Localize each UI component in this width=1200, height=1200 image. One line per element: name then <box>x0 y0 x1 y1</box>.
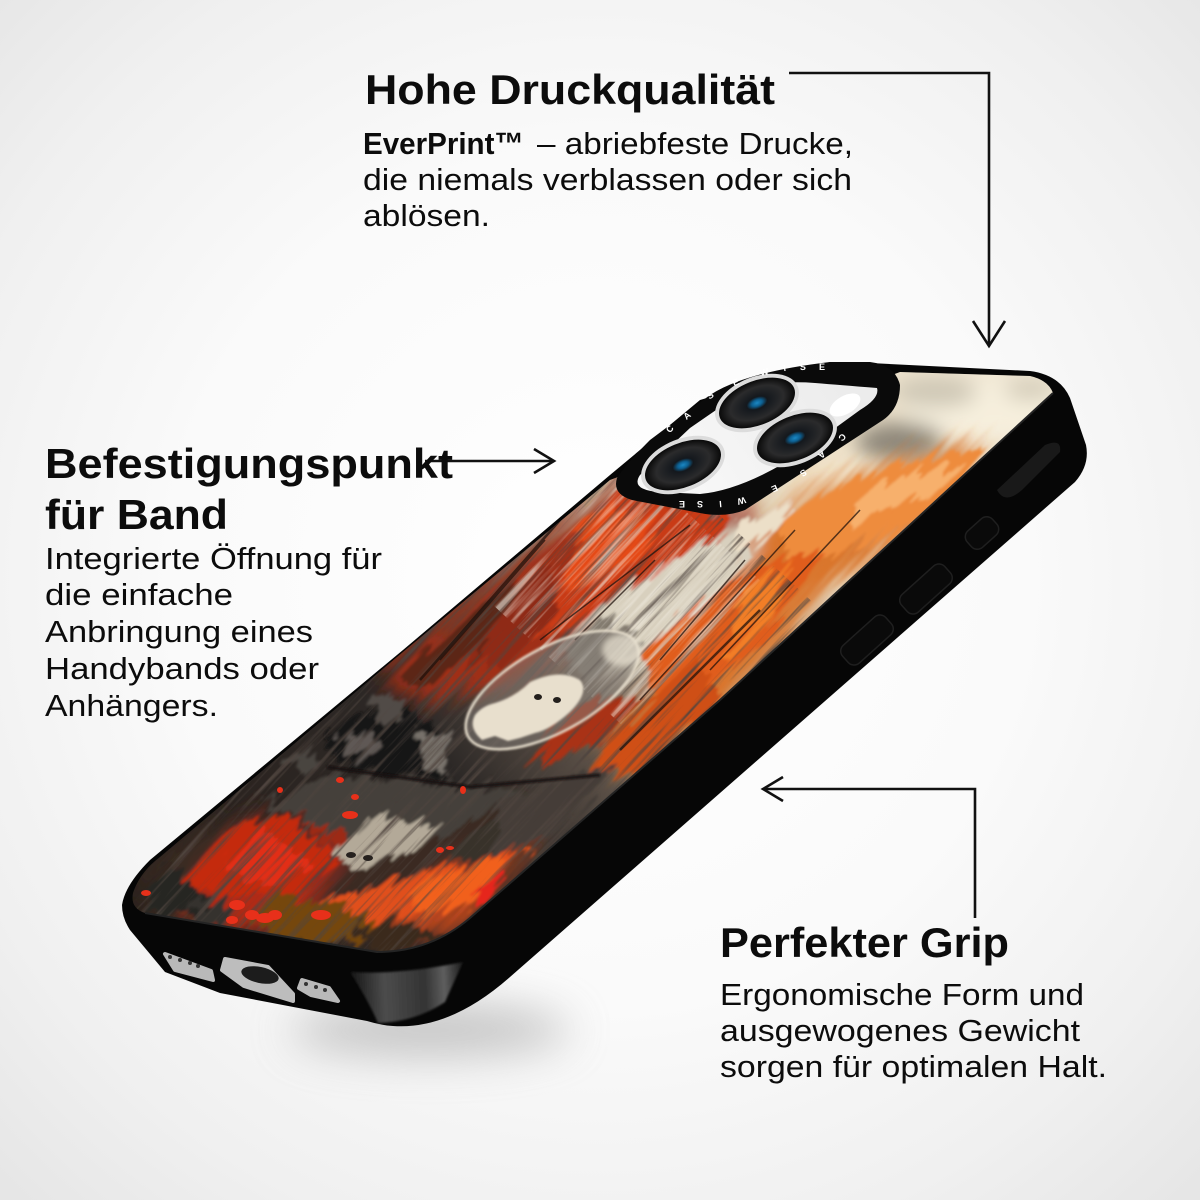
tree trunks <box>420 510 860 750</box>
embers <box>141 777 466 924</box>
heading <box>45 440 453 538</box>
grey water <box>262 762 618 858</box>
text block: strap attachment <box>45 440 453 723</box>
brand lettering upper: W <box>759 366 770 378</box>
lens left <box>632 424 734 506</box>
arrow: strap attachment <box>425 449 554 473</box>
brand lettering upper: S <box>800 362 806 372</box>
camera island <box>616 362 900 515</box>
description: Anbringung eines <box>45 614 313 649</box>
phone case <box>122 362 1087 1026</box>
red foliage <box>400 490 732 692</box>
heading: für Band <box>45 491 228 538</box>
description: EverPrint™ <box>363 126 524 161</box>
description <box>45 541 382 723</box>
ghost eyes <box>534 694 561 703</box>
side buttons <box>837 513 1002 668</box>
phone drop shadow <box>290 1004 570 1056</box>
brand lettering upper: C <box>664 423 676 435</box>
brand lettering upper <box>664 362 825 435</box>
screen rim <box>145 393 1053 952</box>
brand lettering upper: S <box>705 390 716 401</box>
usb opening <box>240 963 280 987</box>
description: sorgen für optimalen Halt. <box>720 1049 1107 1084</box>
brand lettering lower: E <box>679 499 685 509</box>
brand lettering lower: A <box>816 449 827 461</box>
description: die niemals verblassen oder sich <box>363 162 852 197</box>
brand lettering lower <box>679 431 848 509</box>
brand lettering lower: I <box>719 499 722 509</box>
heading: Perfekter Grip <box>720 919 1009 966</box>
arrow: print quality <box>789 73 1005 346</box>
dark tree streaks <box>137 478 811 950</box>
lens right <box>744 397 846 479</box>
description: Integrierte Öffnung für <box>45 541 382 576</box>
lens top <box>706 362 808 444</box>
description <box>720 977 1107 1084</box>
heading: Hohe Druckqualität <box>365 66 775 113</box>
description <box>363 126 853 233</box>
bubble highlight <box>602 634 642 666</box>
bubble <box>462 628 646 752</box>
water line <box>327 767 600 787</box>
speaker right <box>299 980 338 1001</box>
description: ablösen. <box>363 198 490 233</box>
art base <box>132 372 1053 951</box>
brand lettering lower: C <box>836 431 848 443</box>
camera plate <box>638 382 877 494</box>
brand lettering upper: E <box>731 376 741 388</box>
description: die einfache <box>45 577 233 612</box>
orange foliage <box>523 446 987 782</box>
text block: grip <box>720 919 1107 1084</box>
bottom ports <box>165 954 338 1001</box>
ghost <box>473 674 583 741</box>
brand lettering upper: E <box>819 362 825 372</box>
description: Handybands oder <box>45 651 319 686</box>
reflected ghost eyes <box>346 852 373 861</box>
reflected ghost <box>330 815 437 870</box>
glossy lower corner <box>350 962 463 1023</box>
bottom foliage <box>178 808 537 951</box>
speaker left <box>165 954 213 980</box>
side button: action <box>997 443 1060 498</box>
text block: print quality <box>363 66 853 233</box>
printed artwork <box>132 372 1053 951</box>
brand lettering lower: S <box>697 499 703 509</box>
brand lettering lower: W <box>736 495 747 507</box>
soft underpainting <box>140 426 996 949</box>
brand lettering lower: S <box>798 467 809 479</box>
usb port <box>222 959 293 1001</box>
speaker holes <box>168 955 327 992</box>
pale mist <box>558 498 796 671</box>
case body <box>122 362 1087 1026</box>
streaked painting <box>136 426 996 951</box>
pale streaks <box>492 458 760 727</box>
sky clouds <box>846 372 1053 467</box>
brand lettering upper: I <box>783 363 787 373</box>
arrow: grip <box>763 777 975 918</box>
flash <box>826 389 864 421</box>
description: – abriebfeste Drucke, <box>537 126 853 161</box>
description: Ergonomische Form und <box>720 977 1084 1012</box>
heading: Befestigungspunkt <box>45 440 453 487</box>
bubble rim <box>462 628 641 752</box>
description: ausgewogenes Gewicht <box>720 1013 1080 1048</box>
rocks <box>144 691 454 925</box>
brand lettering lower: E <box>770 483 779 494</box>
island frame <box>616 362 900 515</box>
description: Anhängers. <box>45 688 218 723</box>
brand lettering upper: A <box>681 409 693 422</box>
